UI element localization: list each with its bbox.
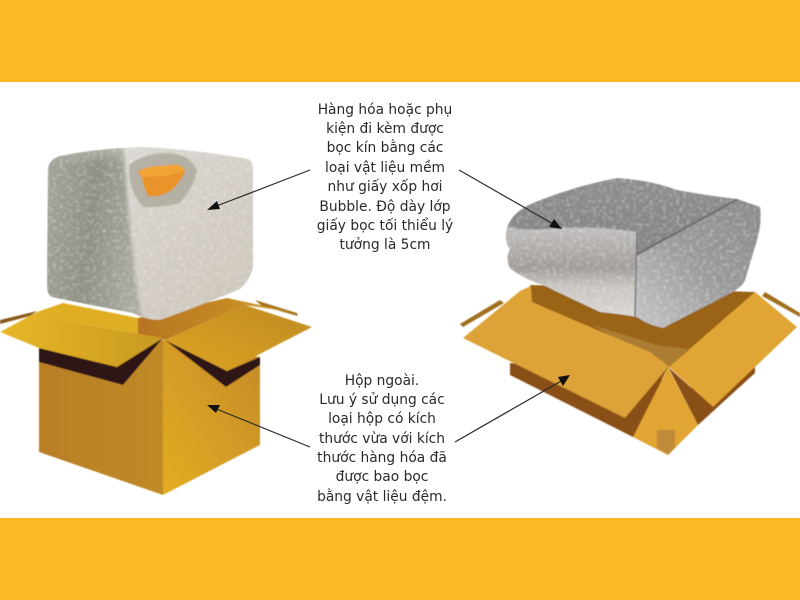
arrow: to right box	[455, 375, 570, 442]
text: outer box note: thước hàng hóa đã	[317, 450, 447, 466]
text: wrapping note: loại vật liệu mềm	[325, 159, 445, 176]
left front flap	[0, 312, 163, 367]
arrow: to left wrap	[207, 170, 310, 210]
text: outer box note: được bao bọc	[336, 469, 428, 485]
right front flap	[165, 305, 312, 371]
illustration: open box with wrapped item (right)	[460, 170, 800, 455]
opening in wrap	[129, 153, 197, 207]
text: wrapping note: Hàng hóa hoặc phụ	[318, 102, 452, 118]
text: outer box note: Lưu ý sử dụng các	[319, 392, 445, 408]
bottom yellow band	[0, 518, 800, 600]
box back flaps	[37, 298, 297, 340]
arrow: to left box	[207, 405, 310, 447]
back flap tips	[460, 292, 800, 327]
text: wrapping note: như giấy xốp hơi	[328, 178, 442, 195]
illustration: open box with wrapped cube (left)	[0, 145, 312, 495]
text: outer box note: thước vừa với kích	[319, 431, 445, 447]
text: wrapping note	[317, 102, 453, 253]
lower box sides	[510, 350, 755, 437]
box right face	[163, 340, 260, 495]
text: wrapping note: bọc kín bằng các	[327, 139, 443, 156]
box left face	[39, 340, 163, 495]
bubble-wrapped package	[506, 177, 762, 329]
text: outer box note: Hộp ngoài.	[345, 373, 419, 389]
front corner of box	[633, 368, 698, 455]
text: wrapping note: tưởng là 5cm	[340, 237, 430, 253]
text: wrapping note: giấy bọc tối thiểu lý	[317, 217, 453, 234]
text: outer box note	[317, 373, 447, 505]
box interior	[530, 285, 755, 368]
bubble-wrapped cube	[45, 145, 255, 325]
text: wrapping note: kiện đi kèm được	[326, 121, 444, 137]
arrow: to right wrap	[459, 170, 562, 229]
text: outer box note: bằng vật liệu đệm.	[317, 488, 447, 505]
text: outer box note: loại hộp có kích	[328, 411, 436, 427]
text: wrapping note: Bubble. Độ dày lớp	[319, 199, 451, 215]
left front flap	[463, 286, 670, 418]
box back flap tips	[0, 300, 298, 324]
tape on box corner	[657, 430, 675, 455]
right front flap	[669, 292, 797, 407]
dark wedges at corner	[625, 367, 713, 437]
dark inner strips	[39, 338, 260, 387]
top yellow band	[0, 0, 800, 82]
orange product	[138, 165, 185, 196]
